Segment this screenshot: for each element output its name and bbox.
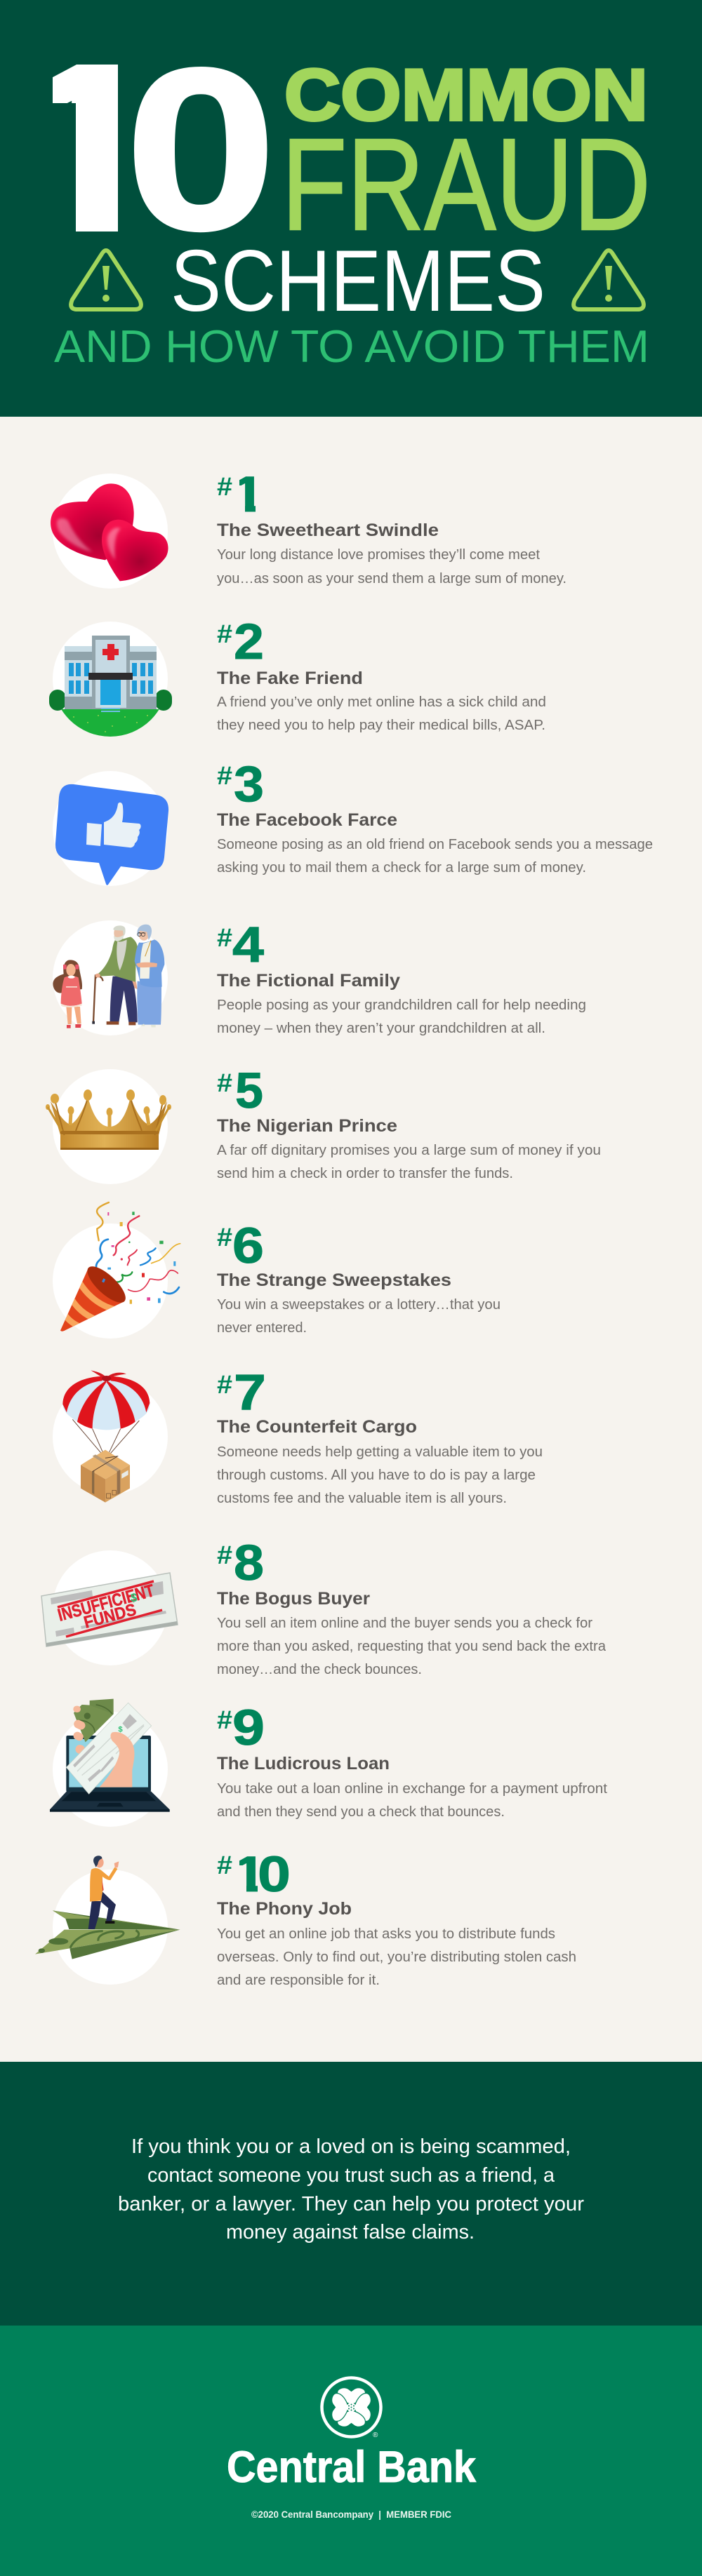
panel: scheme 4 <box>53 918 586 1036</box>
icon: bounced check: FUNDS <box>82 1600 138 1632</box>
number 4 <box>217 918 265 973</box>
description: never entered. <box>217 1320 307 1336</box>
description <box>217 547 567 586</box>
title number 10 <box>53 65 267 233</box>
advice text <box>118 2135 584 2243</box>
number 2 <box>217 615 264 670</box>
heading: The Bogus Buyer <box>217 1589 370 1609</box>
description: A far off dignitary promises you a large sum of money if you <box>217 1143 601 1158</box>
icon: bounced check <box>41 1550 178 1665</box>
heading: The Ludicrous Loan <box>217 1754 390 1773</box>
description: customs fee and the valuable item is all yours. <box>217 1491 507 1506</box>
description: they need you to help pay their medical bills, ASAP. <box>217 718 545 733</box>
number 7: # <box>217 1370 232 1399</box>
advice text: banker, or a lawyer. They can help you protect your <box>118 2193 584 2215</box>
description: Someone needs help getting a valuable item to you <box>217 1444 543 1460</box>
number 8: # <box>217 1541 232 1569</box>
description: through customs. All you have to do is pay a large <box>217 1468 536 1483</box>
description: send him a check in order to transfer the funds. <box>217 1166 513 1181</box>
description: overseas. Only to find out, you’re distributing stolen cash <box>217 1950 576 1965</box>
panel: scheme 6 <box>53 1202 501 1339</box>
icon: man on money paper plane <box>35 1856 180 1985</box>
subtitle: AND HOW TO AVOID THEM <box>54 321 649 372</box>
heading: The Phony Job <box>217 1899 352 1919</box>
description <box>217 1297 501 1336</box>
panel: footer <box>0 2326 702 2576</box>
description: money – when they aren’t your grandchildren at all. <box>217 1021 545 1036</box>
number 2: 2 <box>234 615 264 670</box>
number 9: 9 <box>232 1700 265 1756</box>
description <box>217 1616 607 1677</box>
number 10: 0 <box>258 1847 291 1903</box>
advice text: If you think you or a loved on is being scammed, <box>131 2135 571 2158</box>
description: and then they send you a check that bounces. <box>217 1804 505 1820</box>
description <box>217 695 546 733</box>
panel: scheme 9 <box>50 1699 607 1827</box>
icon: two hearts <box>51 474 168 589</box>
icon: crown <box>46 1069 171 1184</box>
number 5 <box>217 1064 263 1119</box>
number 4: # <box>217 923 232 952</box>
advice text: money against false claims. <box>226 2221 475 2243</box>
panel: scheme 8 <box>41 1536 607 1677</box>
number 3: 3 <box>234 757 264 812</box>
icon: facebook like bubble <box>53 771 168 886</box>
number 4: 4 <box>232 918 265 973</box>
number 7 <box>217 1365 266 1421</box>
icon: bounced check: INSUFFICIENT <box>55 1581 157 1625</box>
heading: The Fictional Family <box>217 971 400 991</box>
number 10: # <box>217 1851 232 1879</box>
description: Your long distance love promises they’ll come meet <box>217 547 540 563</box>
number 5: 5 <box>235 1064 263 1119</box>
title number 10: 0 <box>125 20 277 278</box>
description <box>217 837 653 876</box>
number 8: 8 <box>234 1536 264 1591</box>
number 6: # <box>217 1223 232 1252</box>
description: A friend you’ve only met online has a sick child and <box>217 695 546 710</box>
number 7: 7 <box>234 1365 266 1421</box>
heading: The Facebook Farce <box>217 810 397 830</box>
panel: scheme 10 <box>35 1847 576 1988</box>
advice text: contact someone you trust such as a friend, a <box>147 2164 555 2187</box>
number 6 <box>217 1219 264 1274</box>
number 3: # <box>217 761 232 790</box>
panel: scheme 7 <box>53 1365 543 1506</box>
number 8 <box>217 1536 264 1591</box>
panel: scheme 2 <box>49 622 545 737</box>
icon: warning triangle left <box>71 250 141 309</box>
description: money…and the check bounces. <box>217 1662 422 1677</box>
panel: scheme 1 <box>51 467 567 589</box>
number 5: # <box>217 1068 232 1097</box>
heading: The Strange Sweepstakes <box>217 1270 451 1290</box>
description: People posing as your grandchildren call for help needing <box>217 998 586 1013</box>
number 10: 1 <box>233 1847 266 1903</box>
number 9: # <box>217 1705 232 1734</box>
icon: party popper <box>53 1202 180 1339</box>
icon: parachute and box <box>53 1370 168 1503</box>
number 1: 1 <box>232 467 265 523</box>
heading: The Counterfeit Cargo <box>217 1417 417 1437</box>
title word COMMON: COMMON <box>284 55 648 136</box>
logo: flower emblem: ® <box>373 2431 378 2439</box>
number 9 <box>217 1700 265 1756</box>
description <box>217 1781 607 1820</box>
title number 10: 1 <box>8 17 168 279</box>
heading: The Fake Friend <box>217 669 363 688</box>
logo wordmark: Central Bank <box>227 2443 477 2492</box>
logo: flower emblem <box>322 2378 380 2439</box>
heading: The Sweetheart Swindle <box>217 521 439 540</box>
panel: scheme 5 <box>46 1064 601 1184</box>
description: You take out a loan online in exchange for a payment upfront <box>217 1781 607 1797</box>
description: You sell an item online and the buyer sends you a check for <box>217 1616 592 1631</box>
icon: bounced check: $ <box>131 1591 138 1604</box>
icon: laptop with check and cash <box>50 1699 170 1827</box>
description: and are responsible for it. <box>217 1973 380 1988</box>
description: asking you to mail them a check for a large sum of money. <box>217 860 586 876</box>
number 2: # <box>217 619 232 648</box>
number 10 <box>218 1856 289 1892</box>
copyright line: ©2020 Central Bancompany | MEMBER FDIC <box>251 2509 451 2520</box>
title word SCHEMES: SCHEMES <box>171 233 545 330</box>
description: You get an online job that asks you to distribute funds <box>217 1926 555 1942</box>
heading: The Nigerian Prince <box>217 1116 397 1136</box>
description: You win a sweepstakes or a lottery…that you <box>217 1297 501 1313</box>
panel: scheme 3 <box>53 757 653 886</box>
icon: grandparents and child <box>53 920 168 1035</box>
description <box>217 1444 543 1506</box>
panel: header <box>0 0 702 417</box>
icon: hospital <box>49 622 172 737</box>
description <box>217 1143 601 1181</box>
number 1: # <box>217 472 232 501</box>
description <box>217 1926 576 1988</box>
number 1 <box>218 476 256 512</box>
panel: advice callout <box>0 2062 702 2326</box>
number 6: 6 <box>232 1219 264 1274</box>
description <box>217 998 586 1036</box>
number 3 <box>217 757 264 812</box>
description: more than you asked, requesting that you send back the extra <box>217 1639 607 1654</box>
icon: warning triangle right <box>574 250 644 309</box>
description: you…as soon as your send them a large sum of money. <box>217 571 567 586</box>
description: Someone posing as an old friend on Facebook sends you a message <box>217 837 653 852</box>
icon: laptop with check and cash: $ <box>118 1726 123 1734</box>
